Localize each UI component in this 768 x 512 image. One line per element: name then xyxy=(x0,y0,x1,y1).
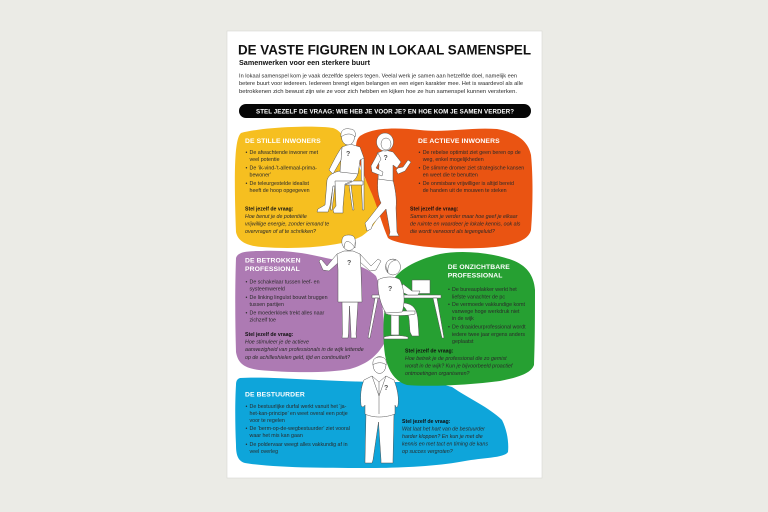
question xyxy=(245,207,329,235)
bullet list: weg, enkel mogelijkheden xyxy=(423,157,484,163)
bullet list: • xyxy=(418,150,420,156)
bullet list: • xyxy=(246,310,248,316)
bullet list: De onmisbare vrijwilliger is altijd bereid xyxy=(423,181,514,187)
blue blob xyxy=(235,378,508,468)
panel: de betrokken professional xyxy=(235,251,385,372)
question: Stel jezelf de vraag: xyxy=(245,332,294,338)
bullet list: • xyxy=(246,404,248,410)
question xyxy=(405,349,513,377)
question xyxy=(245,332,364,361)
question: Samen kom je verder maar hoe geef je elkaar xyxy=(410,214,518,220)
question: overvragen of af te schrikken? xyxy=(245,229,316,235)
figure: woman in dress xyxy=(319,235,381,338)
question xyxy=(402,419,488,455)
question: Hoe betrek je de professional die zo gemist xyxy=(405,356,507,362)
bullet list: • xyxy=(246,166,248,172)
heading xyxy=(245,258,301,273)
heading: DE ACTIEVE INWONERS xyxy=(418,138,500,145)
figure: professional at desk xyxy=(368,259,444,339)
bullet list: • xyxy=(246,181,248,187)
bullet list: • xyxy=(448,287,450,293)
heading: DE ONZICHTBARE xyxy=(448,264,510,271)
bullet list: De bureauplakker werkt het xyxy=(452,287,517,293)
bullet list: het-kan-principe’ en weet overal een potje xyxy=(250,411,348,417)
figure: walking woman xyxy=(365,133,411,236)
bullet list: De afwachtende inwoner met xyxy=(250,150,319,156)
bullet list: in de wijk xyxy=(452,316,474,322)
question: kennis en met tact en timing de kans xyxy=(402,442,488,448)
bullet list: De schakelaar tussen leef- en xyxy=(250,280,320,286)
bullet list: De moederkloek trekt alles naar xyxy=(250,310,325,316)
bullet list: • xyxy=(418,166,420,172)
bullet list: en weet die te benutten xyxy=(423,172,478,178)
bullet list: De teleurgestelde idealist xyxy=(250,181,310,187)
panel: de onzichtbare professional xyxy=(383,252,535,386)
question: Wat laat het hart van de bestuurder xyxy=(402,426,485,432)
figure: suited man xyxy=(361,356,398,463)
bullet list: veel overleg xyxy=(250,449,278,455)
bullet list: De ‘ik-vind-’t-allemaal-prima- xyxy=(250,166,317,172)
yellow blob xyxy=(235,127,379,248)
bullet list: De poldervaar weegt alles vakkundig af in xyxy=(250,442,348,448)
bullet list: De linking linguïst bouwt bruggen xyxy=(250,295,328,301)
subtitle: Samenwerken voor een sterkere buurt xyxy=(239,58,370,67)
title: DE VASTE FIGUREN IN LOKAAL SAMENSPEL xyxy=(238,42,531,58)
heading: DE STILLE INWONERS xyxy=(245,138,321,145)
bullet list: De vermoede vakkundige komt xyxy=(452,302,526,308)
bullet list: • xyxy=(246,150,248,156)
question xyxy=(410,207,521,235)
bullet list: systeemwereld xyxy=(250,286,285,292)
question banner xyxy=(239,104,531,118)
heading: PROFESSIONAL xyxy=(245,266,300,273)
figure: seated man: ? xyxy=(346,151,350,158)
bullet list: • xyxy=(246,280,248,286)
bullet list: voor te regelen xyxy=(250,418,285,424)
bullet list: vanwege hoge werkdruk niet xyxy=(452,309,520,315)
question: op de achilleshielen geld, tijd en continuïteit? xyxy=(245,355,350,361)
intro text: In lokaal samenspel kom je vaak dezelfde spelers tegen. Veelal werk je samen aan hetzelfde doel, namelijk een xyxy=(239,74,517,80)
figure: seated man xyxy=(317,129,364,213)
question: de ruimte en waardeer je lokale kennis, ook als xyxy=(410,222,521,228)
bullet list xyxy=(246,404,350,455)
bullet list: • xyxy=(448,302,450,308)
bullet list xyxy=(418,150,524,194)
bullet list: tussen partijen xyxy=(250,302,284,308)
question: vrijwillige energie, zonder iemand te xyxy=(245,222,329,228)
question: aanwezigheid van professionals in de wijk lettende xyxy=(245,347,364,353)
bullet list: liefste vanachter de pc xyxy=(452,294,505,300)
question: op succes vergroten? xyxy=(402,449,453,455)
green blob xyxy=(383,252,535,386)
heading xyxy=(448,264,510,279)
figure: professional at desk: ? xyxy=(388,286,392,293)
purple blob xyxy=(235,251,385,372)
intro text: betere buurt voor iedereen. Iedereen brengt eigen belangen en een eigen karakter mee. Het is waardevol als alle xyxy=(239,81,523,87)
orange blob xyxy=(356,128,532,248)
bullet list: • xyxy=(448,324,450,330)
bullet list xyxy=(448,287,526,345)
question: Stel jezelf de vraag: xyxy=(245,207,294,213)
bullet list: De rebelse optimist ziet geen beren op de xyxy=(423,150,521,156)
bullet list: De draaideurprofessional wordt xyxy=(452,324,526,330)
heading: PROFESSIONAL xyxy=(448,272,503,279)
figure: suited man: ? xyxy=(384,385,388,392)
bullet list: iedere twee jaar ergens anders xyxy=(452,332,525,338)
intro text xyxy=(239,74,523,95)
question banner: STEL JEZELF DE VRAAG: WIE HEB JE VOOR JE? EN HOE KOM JE SAMEN VERDER? xyxy=(256,108,514,115)
bullet list: • xyxy=(246,442,248,448)
bullet list: veel potentie xyxy=(250,157,280,163)
question: Hoe stimuleer je de actieve xyxy=(245,340,309,346)
heading: DE BETROKKEN xyxy=(245,258,301,264)
panel: de actieve inwoners xyxy=(356,128,532,248)
question: Stel jezelf de vraag: xyxy=(410,207,459,213)
bullet list: De slimme dromer ziet strategische kansen xyxy=(423,166,524,172)
panel: de stille inwoners xyxy=(235,127,379,248)
question: ontmoetingen organiseren? xyxy=(405,371,470,377)
question: Stel jezelf de vraag: xyxy=(402,419,451,425)
question: Stel jezelf de vraag: xyxy=(405,349,454,355)
panel: de bestuurder xyxy=(235,378,508,468)
poster sheet xyxy=(227,31,542,478)
heading: DE BESTUURDER xyxy=(245,392,305,398)
bullet list: • xyxy=(418,181,420,187)
figure: woman in dress: ? xyxy=(347,260,351,267)
bullet list: • xyxy=(246,295,248,301)
question: Hoe benut je de potentiële xyxy=(245,214,307,220)
bullet list: de handen uit de mouwen te steken xyxy=(423,188,507,194)
bullet list: geplaatst xyxy=(452,339,474,345)
bullet list: heeft de hoop opgegeven xyxy=(250,188,310,194)
question: harder kloppen? En kun je met die xyxy=(402,434,483,440)
figure: walking woman: ? xyxy=(384,155,388,162)
bullet list: De bestuurlijke durfal werkt vanuit het ‘ja- xyxy=(250,404,347,410)
bullet list xyxy=(246,150,319,194)
bullet list: • xyxy=(246,426,248,432)
bullet list: De ‘berm-op-de-wegbestuurder’ ziet vooral xyxy=(250,426,350,432)
bullet list: waar het mis kan gaan xyxy=(250,433,303,439)
intro text: betrokkenen zich bewust zijn wie ze voor zich hebben en kijken hoe ze hun samenspel kunnen versterken. xyxy=(239,89,517,95)
bullet list: zichzelf toe xyxy=(250,318,276,324)
question: die wordt verwoord als tegengeluid? xyxy=(410,229,495,235)
question: wordt in de wijk? Kun je bijvoorbeeld proactief xyxy=(405,364,513,370)
bullet list: bewoner’ xyxy=(250,172,271,178)
bullet list xyxy=(246,280,328,324)
